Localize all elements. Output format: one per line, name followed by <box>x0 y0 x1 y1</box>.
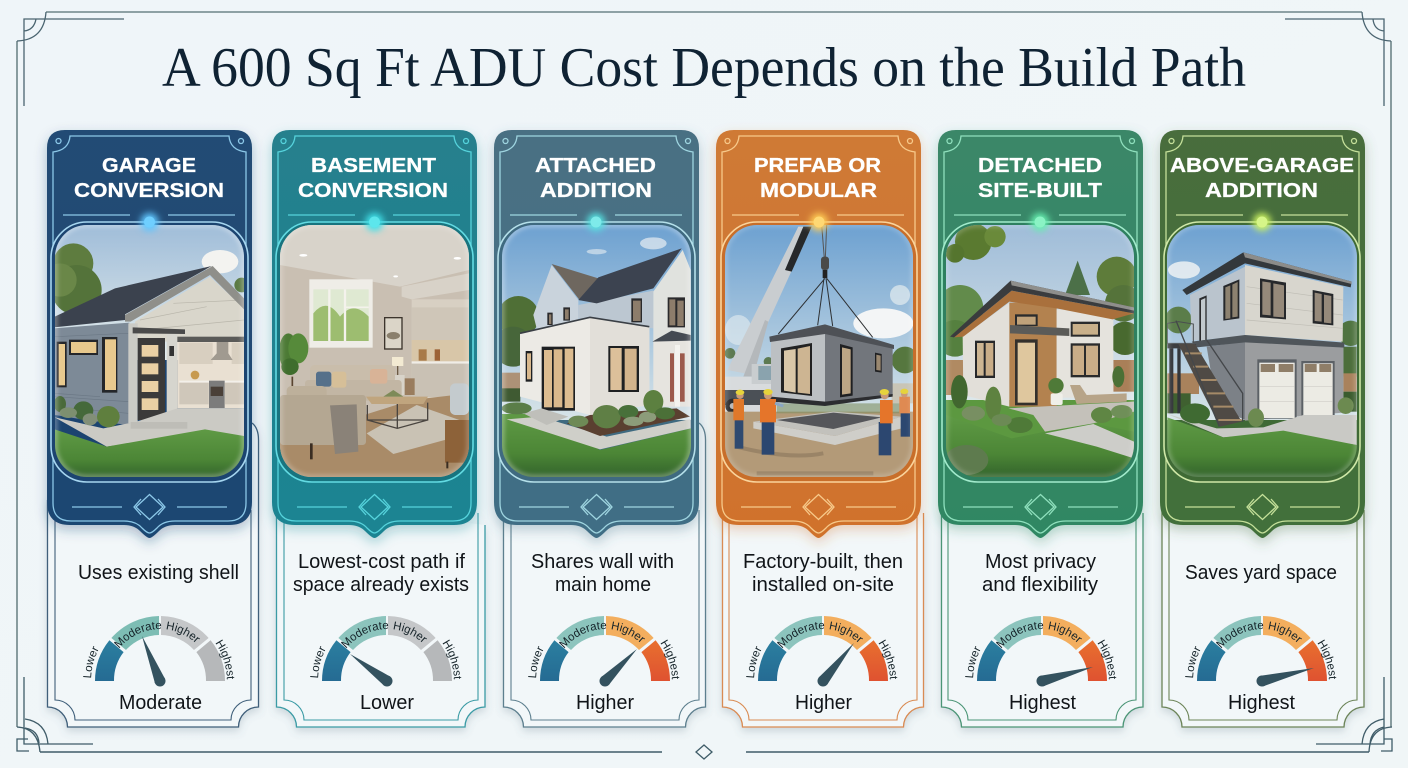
panel: above-garage addition <box>1152 128 1372 734</box>
image frame and photo: apartment above garage <box>1163 220 1363 482</box>
heading <box>754 155 882 202</box>
gauge: higher: Highest <box>878 640 898 680</box>
heading <box>298 155 448 202</box>
gauge: moderate <box>83 616 234 686</box>
description <box>743 551 903 596</box>
heading <box>74 155 224 202</box>
glowing dot <box>1253 213 1271 231</box>
glowing dot <box>140 213 158 231</box>
description: Lowest-cost path if <box>298 551 465 573</box>
gauge: highest: Moderate <box>996 622 1044 648</box>
description frame <box>1162 510 1364 727</box>
gauge value: Higher <box>576 692 634 714</box>
description: Factory-built, then <box>743 551 903 573</box>
gauge value: Highest <box>1228 692 1295 714</box>
image frame and photo: basement living room <box>273 220 473 487</box>
heading: MODULAR <box>760 180 878 202</box>
heading: ADDITION <box>540 180 652 202</box>
description frame <box>276 500 485 727</box>
header card <box>716 130 921 538</box>
glowing dot <box>810 213 828 231</box>
description: installed on-site <box>752 574 894 596</box>
gauge: highest: Lower <box>965 646 980 678</box>
description: main home <box>555 574 651 596</box>
heading: GARAGE <box>102 155 196 177</box>
glowing dot <box>1031 213 1049 231</box>
gauge: higher: Higher <box>830 622 863 642</box>
gauge: highest: Lower <box>1185 646 1200 678</box>
heading: ABOVE-GARAGE <box>1170 155 1354 177</box>
heading <box>1170 155 1354 202</box>
panel: garage conversion <box>40 128 263 734</box>
description: space already exists <box>293 574 469 596</box>
gauge: lower: Moderate <box>341 622 388 648</box>
description frame <box>722 510 924 727</box>
header card <box>47 130 252 538</box>
gauge: highest <box>965 616 1116 686</box>
image frame and photo: detached modern cottage <box>937 220 1142 487</box>
gauge: highest: Higher <box>1268 622 1302 642</box>
description: Saves yard space <box>1185 562 1337 584</box>
panel: prefab or modular <box>709 128 928 734</box>
gauge: highest: Higher <box>1048 622 1082 642</box>
heading <box>978 155 1102 202</box>
glowing dot <box>587 213 605 231</box>
heading: ADDITION <box>1205 180 1318 202</box>
gauge: highest: Highest <box>1098 640 1116 680</box>
heading: ATTACHED <box>535 155 656 177</box>
gauge: higher <box>746 616 898 686</box>
description <box>293 551 469 596</box>
gauge: higher: Higher <box>612 622 645 642</box>
description frame <box>504 423 706 727</box>
description: Shares wall with <box>531 551 674 573</box>
image frame and photo: garage ADU <box>43 220 250 482</box>
gauge: highest: Highest <box>1318 640 1336 680</box>
gauge: highest <box>1185 616 1336 686</box>
description frame <box>48 423 258 727</box>
description <box>982 551 1098 596</box>
description: Most privacy <box>985 551 1096 573</box>
heading: PREFAB OR <box>754 155 882 177</box>
description: and flexibility <box>982 574 1098 596</box>
gauge: higher: Lower <box>746 646 762 678</box>
gauge: higher: Moderate <box>559 622 606 648</box>
gauge: lower: Higher <box>394 622 427 642</box>
header card <box>1160 130 1365 538</box>
gauge: moderate: Moderate <box>114 622 162 648</box>
gauge value: Moderate <box>119 692 202 714</box>
panel: basement conversion <box>265 128 488 734</box>
image frame and photo: crane lifting module <box>720 220 920 487</box>
gauge: highest: Moderate <box>1216 622 1264 648</box>
gauge value: Higher <box>795 692 852 714</box>
gauge: higher: Moderate <box>777 622 824 648</box>
glowing dot <box>366 213 384 231</box>
description frame <box>942 510 1143 727</box>
image frame and photo: attached addition house <box>493 220 697 482</box>
header card <box>494 130 699 538</box>
gauge: lower: Highest <box>442 640 462 680</box>
gauge: lower <box>310 616 462 686</box>
heading: CONVERSION <box>298 180 448 202</box>
panel: detached site-built <box>931 128 1150 734</box>
heading <box>535 155 656 202</box>
gauge: higher: Lower <box>528 646 544 678</box>
gauge: higher <box>528 616 680 686</box>
gauge: higher: Highest <box>660 640 680 680</box>
heading: CONVERSION <box>74 180 224 202</box>
gauge: moderate: Highest <box>216 640 234 680</box>
heading: BASEMENT <box>311 155 436 177</box>
gauge value: Highest <box>1009 692 1076 714</box>
panel: attached addition <box>487 128 710 734</box>
description <box>531 551 674 596</box>
gauge value: Lower <box>360 692 414 714</box>
gauge: moderate: Higher <box>166 622 200 642</box>
header card <box>938 130 1143 538</box>
gauge: moderate: Lower <box>83 646 98 678</box>
gauge: lower: Lower <box>310 646 326 678</box>
heading: SITE-BUILT <box>978 180 1102 202</box>
header card <box>272 130 477 538</box>
description: Uses existing shell <box>78 562 239 584</box>
title: A 600 Sq Ft ADU Cost Depends on the Build Path <box>162 37 1246 99</box>
heading: DETACHED <box>978 155 1102 177</box>
